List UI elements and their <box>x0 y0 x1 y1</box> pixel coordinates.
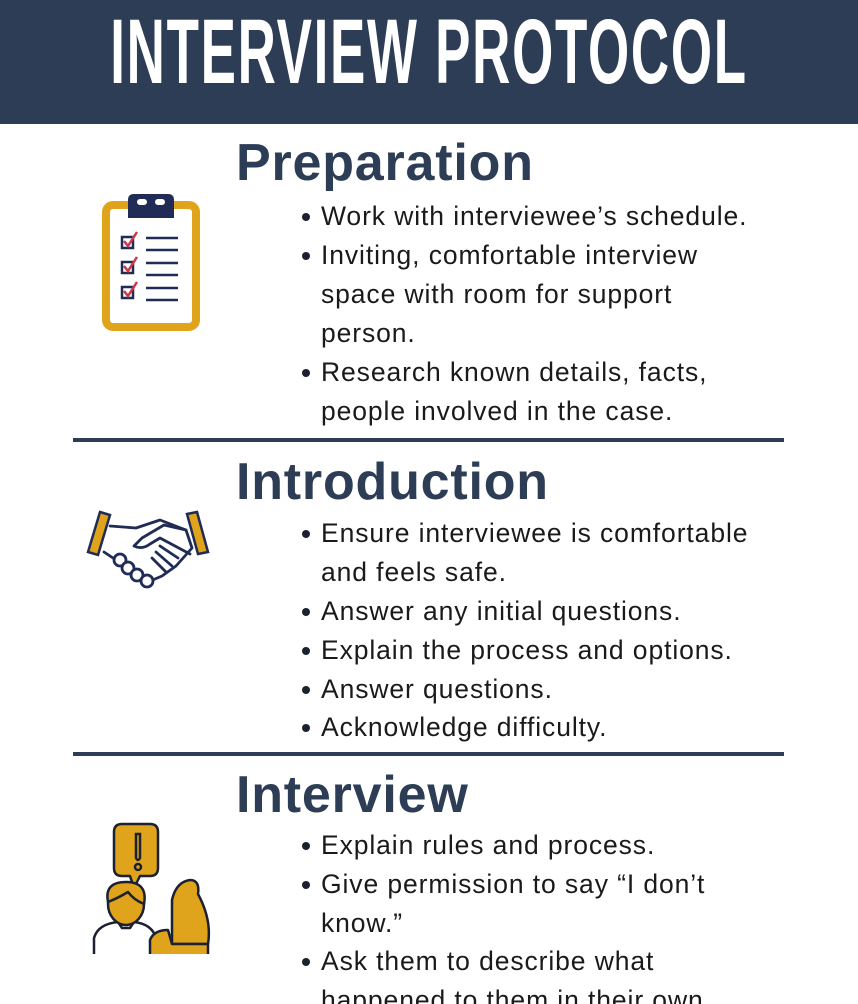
bullets: Preparation <box>302 201 747 426</box>
bullets: Preparation: Inviting, comfortable interview <box>321 240 698 270</box>
bullets: Preparation: Work with interviewee’s schedule. <box>321 201 747 231</box>
icon: people with speech bubble <box>92 822 210 954</box>
bullets: Introduction: Answer questions. <box>321 674 553 704</box>
heading: Preparation: Preparation <box>236 134 534 192</box>
bullets: Interview: Give permission to say “I don’t <box>321 869 705 899</box>
heading: Interview: Interview <box>236 766 469 824</box>
bullets: Preparation: people involved in the case. <box>321 396 673 426</box>
icon: handshake <box>86 510 210 588</box>
bullets: Interview: Explain rules and process. <box>321 830 655 860</box>
bullets: Introduction: Acknowledge difficulty. <box>321 712 607 742</box>
bullets: Interview: Ask them to describe what <box>321 946 654 976</box>
bullets: Introduction: Explain the process and options. <box>321 635 733 665</box>
bullets: Interview: know.” <box>321 908 403 938</box>
bullets: Introduction: and feels safe. <box>321 557 507 587</box>
bullets: Introduction: Answer any initial questions. <box>321 596 681 626</box>
bullets: Preparation: person. <box>321 318 416 348</box>
bullets: Interview <box>302 830 705 1004</box>
bullets: Preparation: Research known details, facts, <box>321 357 707 387</box>
icon: clipboard <box>102 194 200 331</box>
title: INTERVIEW PROTOCOL <box>110 1 748 103</box>
bullets: Introduction <box>302 518 748 742</box>
header banner <box>0 0 858 124</box>
bullets: Preparation: space with room for support <box>321 279 672 309</box>
heading: Introduction: Introduction <box>236 453 549 511</box>
bullets: Introduction: Ensure interviewee is comfortable <box>321 518 748 548</box>
